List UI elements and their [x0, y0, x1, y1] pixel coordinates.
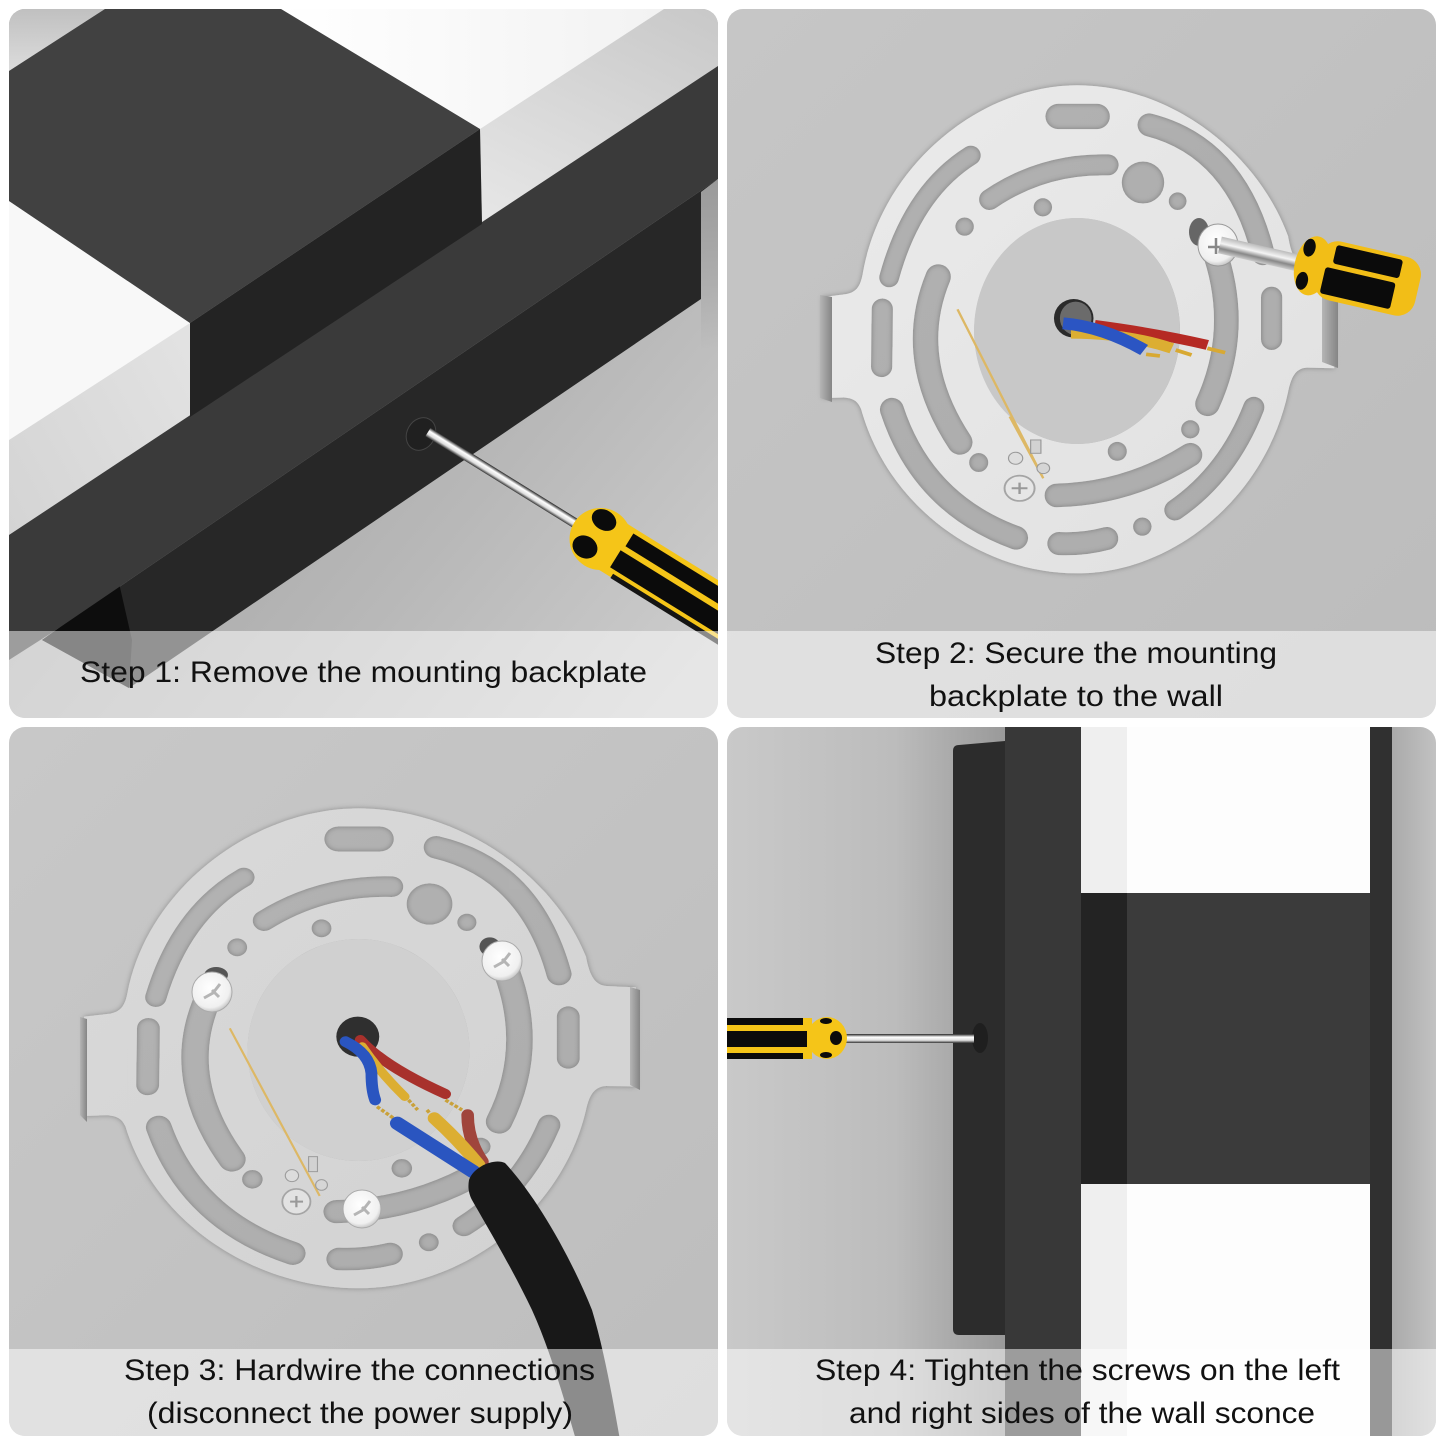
wall background: [727, 727, 1007, 1436]
black cable: [468, 1162, 620, 1440]
screw: left: [192, 972, 232, 1012]
recess shadow: [42, 583, 132, 688]
screwdriver: [426, 428, 718, 645]
wires and hardware: [957, 299, 1225, 501]
lamp body: [1005, 727, 1081, 1436]
wall right strip: [1392, 727, 1436, 1436]
caption: step 2: Step 2: Secure the mounting: [875, 637, 1277, 670]
caption: step 2: [875, 637, 1277, 713]
middle block: [1081, 893, 1370, 1184]
panel: step 4 tighten the screws: [727, 727, 1436, 1436]
lower diffuser: [9, 201, 190, 535]
caption band: [727, 1349, 1436, 1436]
backplate under the bar: [42, 179, 718, 688]
panel: step 1 remove the mounting backplate: [9, 9, 718, 718]
caption: step 4: [815, 1354, 1341, 1430]
caption band: [9, 631, 718, 718]
upper diffuser: [281, 9, 718, 222]
caption: step 4: and right sides of the wall sconce: [849, 1397, 1315, 1430]
caption: step 3: (disconnect the power supply): [147, 1397, 573, 1430]
mounting plate: [820, 85, 1338, 573]
keyhole shadow: [1189, 218, 1209, 246]
wall background: [9, 727, 718, 1436]
wall background: [9, 9, 718, 718]
screw: bottom: [343, 1190, 381, 1228]
caption: step 2: backplate to the wall: [929, 680, 1223, 713]
screw head: [1198, 224, 1238, 266]
wall background: [727, 9, 1436, 718]
top-left wall corner: [9, 9, 105, 71]
screw: right: [482, 941, 522, 981]
screw head: [406, 417, 436, 451]
panel: step 3 hardwire the connections: [9, 727, 718, 1440]
wall sliver at right: [701, 180, 718, 310]
mounting plate: [80, 808, 640, 1288]
upper diffuser: [1081, 727, 1127, 893]
caption band: [9, 1349, 718, 1436]
right rail: [1370, 727, 1392, 1436]
caption: step 4: Step 4: Tighten the screws on the left: [815, 1354, 1341, 1387]
screwdriver: [1218, 236, 1421, 316]
wires and hardware: [204, 937, 500, 1214]
caption: step 1: Step 1: Remove the mounting backplate: [80, 656, 647, 689]
caption band: [727, 631, 1436, 718]
caption: step 3: [124, 1354, 595, 1430]
lamp bar front face: [9, 66, 718, 660]
screw head: [972, 1023, 988, 1053]
backplate: [953, 741, 1005, 1335]
lamp top block: [9, 9, 482, 417]
panel: step 2 secure the backplate: [727, 9, 1436, 718]
caption: step 3: Step 3: Hardwire the connections: [124, 1354, 595, 1387]
lower diffuser: [1081, 1184, 1370, 1436]
screwdriver: [727, 1017, 974, 1059]
